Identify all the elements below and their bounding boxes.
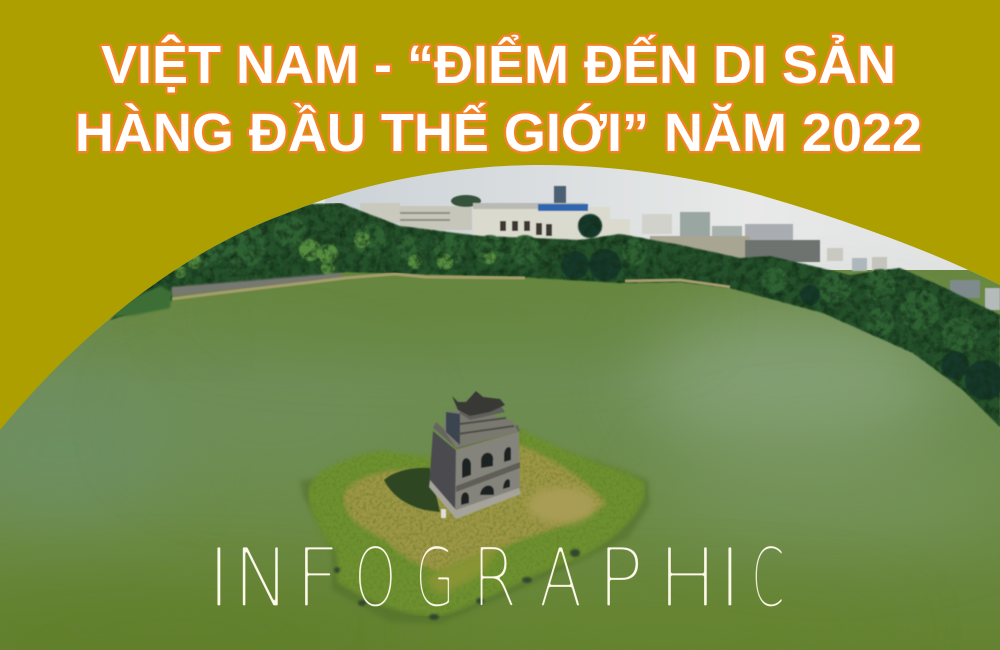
- subtitle: INFOGRAPHIC: I: [718, 532, 742, 626]
- lake water: [0, 270, 1000, 650]
- subtitle: INFOGRAPHIC: R: [472, 532, 517, 626]
- left shore road and bushes: [110, 273, 730, 317]
- subtitle: INFOGRAPHIC: F: [295, 531, 340, 625]
- subtitle: INFOGRAPHIC: O: [354, 532, 397, 626]
- subtitle: INFOGRAPHIC: I: [207, 532, 231, 626]
- subtitle: INFOGRAPHIC: H: [658, 531, 717, 625]
- photo: Hoan Kiem lake in arched frame: [0, 160, 1000, 650]
- title: [75, 34, 922, 163]
- rocks on shore: [334, 549, 580, 620]
- title: VIỆT NAM - “ĐIỂM ĐẾN DI SẢN: [101, 34, 896, 95]
- tower shadow on grass: [384, 468, 440, 512]
- turtle tower island: [300, 391, 650, 624]
- island dry grass: [343, 445, 607, 572]
- city buildings: [296, 186, 1000, 310]
- island shadow in water: [300, 460, 650, 624]
- subtitle: INFOGRAPHIC: C: [751, 531, 785, 625]
- tower: [429, 391, 521, 519]
- sky: [96, 165, 1000, 330]
- tower arches: [481, 453, 493, 468]
- island grass: [308, 428, 645, 616]
- subtitle: INFOGRAPHIC: A: [539, 532, 582, 626]
- title: HÀNG ĐẦU THẾ GIỚI” NĂM 2022: [75, 103, 922, 163]
- subtitle: INFOGRAPHIC: G: [415, 532, 455, 626]
- far shore trees: [110, 203, 1000, 427]
- subtitle: INFOGRAPHIC: P: [598, 531, 643, 626]
- subtitle: INFOGRAPHIC: N: [233, 531, 290, 626]
- subtitle: INFOGRAPHIC: [207, 531, 785, 626]
